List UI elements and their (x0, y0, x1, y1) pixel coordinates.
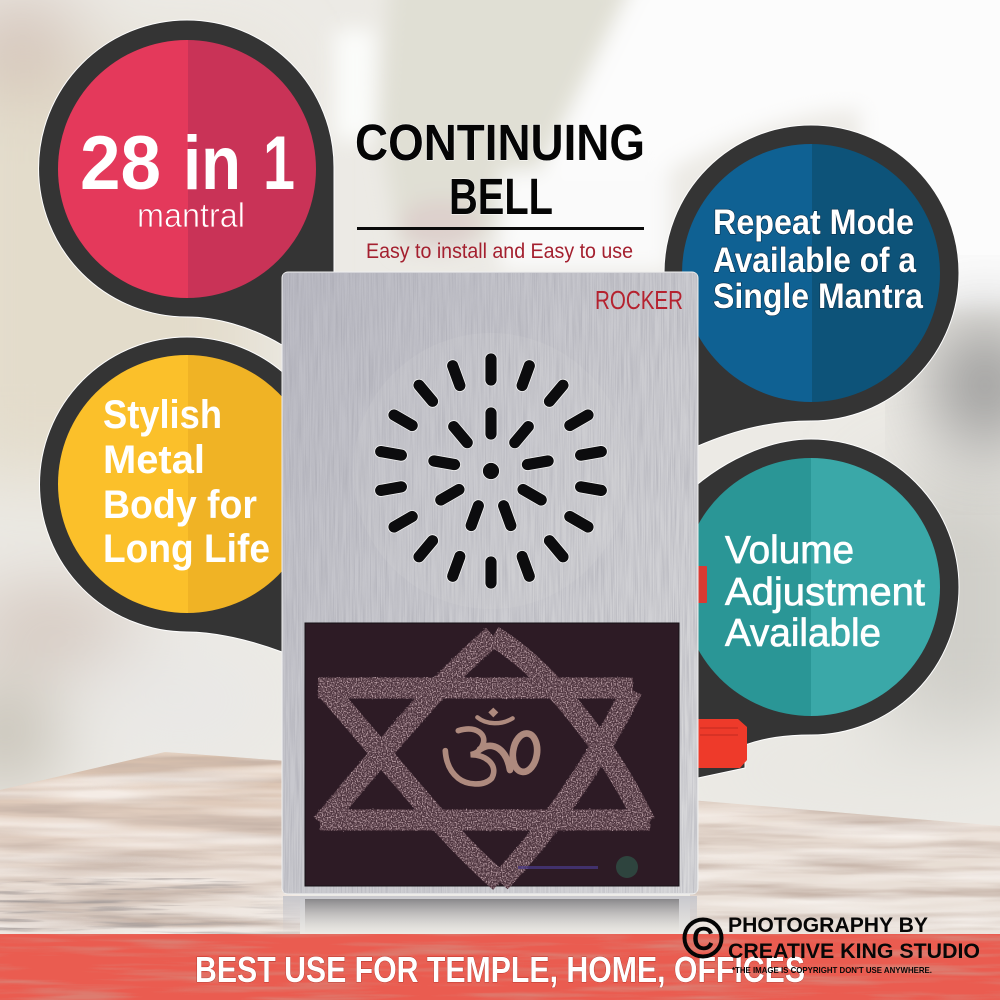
teal disc (682, 458, 941, 718)
divider rule (357, 227, 644, 230)
feature text: Stylish (103, 393, 222, 437)
feature text: Available (725, 612, 881, 655)
metal device body (282, 272, 698, 894)
brushed aluminium plate (282, 272, 698, 894)
hexagram scratches (318, 636, 650, 882)
feature text: Body for (103, 483, 257, 527)
red volume knob (696, 719, 747, 768)
icon: om symbol (445, 708, 540, 784)
photography credit (684, 913, 980, 975)
feature text (713, 203, 923, 316)
feature text: Single Mantra (713, 277, 923, 316)
feature text (103, 393, 270, 571)
panel: repeat mode badge (664, 125, 959, 446)
dark speech bubble (39, 20, 334, 345)
dark speech bubble (40, 337, 335, 665)
subtitle: Easy to install and Easy to use (366, 240, 633, 263)
title: CONTINUING (355, 114, 645, 171)
small red side switch (696, 566, 707, 603)
title: BELL (449, 168, 553, 225)
device reflection on table (283, 896, 697, 934)
feature text: Repeat Mode (713, 203, 914, 242)
blue disc (682, 144, 942, 404)
heading block (355, 114, 645, 263)
panel: stylish metal badge (39, 336, 282, 652)
big label: in (183, 121, 241, 206)
yellow disc (58, 355, 282, 613)
feature text: Volume (725, 529, 854, 572)
dark speech bubble (680, 439, 959, 778)
feature text: Available of a (713, 241, 916, 280)
credit lines: PHOTOGRAPHY BY (728, 913, 928, 937)
wooden table (0, 750, 1000, 938)
feature text: Long Life (103, 527, 270, 571)
big label: 1 (263, 121, 295, 206)
dark plaque with star and om (305, 623, 679, 886)
icon: copyright mark: C (692, 920, 714, 957)
panel: volume badge (680, 439, 959, 778)
big label: 28 (80, 121, 161, 206)
speaker halo (353, 333, 629, 609)
big label (80, 121, 295, 206)
sub label: mantral (137, 197, 245, 235)
banner text: BEST USE FOR TEMPLE, HOME, OFFICES (195, 949, 805, 990)
credit lines (728, 913, 980, 975)
credit lines: *THE IMAGE IS COPYRIGHT DON'T USE ANYWHERE. (732, 965, 932, 975)
salmon banner band (0, 934, 1000, 1000)
dark speech bubble (664, 125, 959, 446)
hexagram solid tone (318, 636, 650, 882)
feature text: Metal (103, 438, 205, 482)
title (355, 114, 645, 225)
red disc (58, 40, 318, 300)
credit lines: CREATIVE KING STUDIO (728, 939, 980, 963)
panel: 28 in 1 badge (39, 20, 334, 345)
feature text: Adjustment (725, 571, 925, 614)
icon: copyright mark (684, 920, 722, 957)
brand logo: ROCKER (595, 285, 683, 315)
small hologram sticker (518, 856, 638, 878)
feature text (725, 529, 925, 655)
speaker grille (374, 353, 608, 589)
